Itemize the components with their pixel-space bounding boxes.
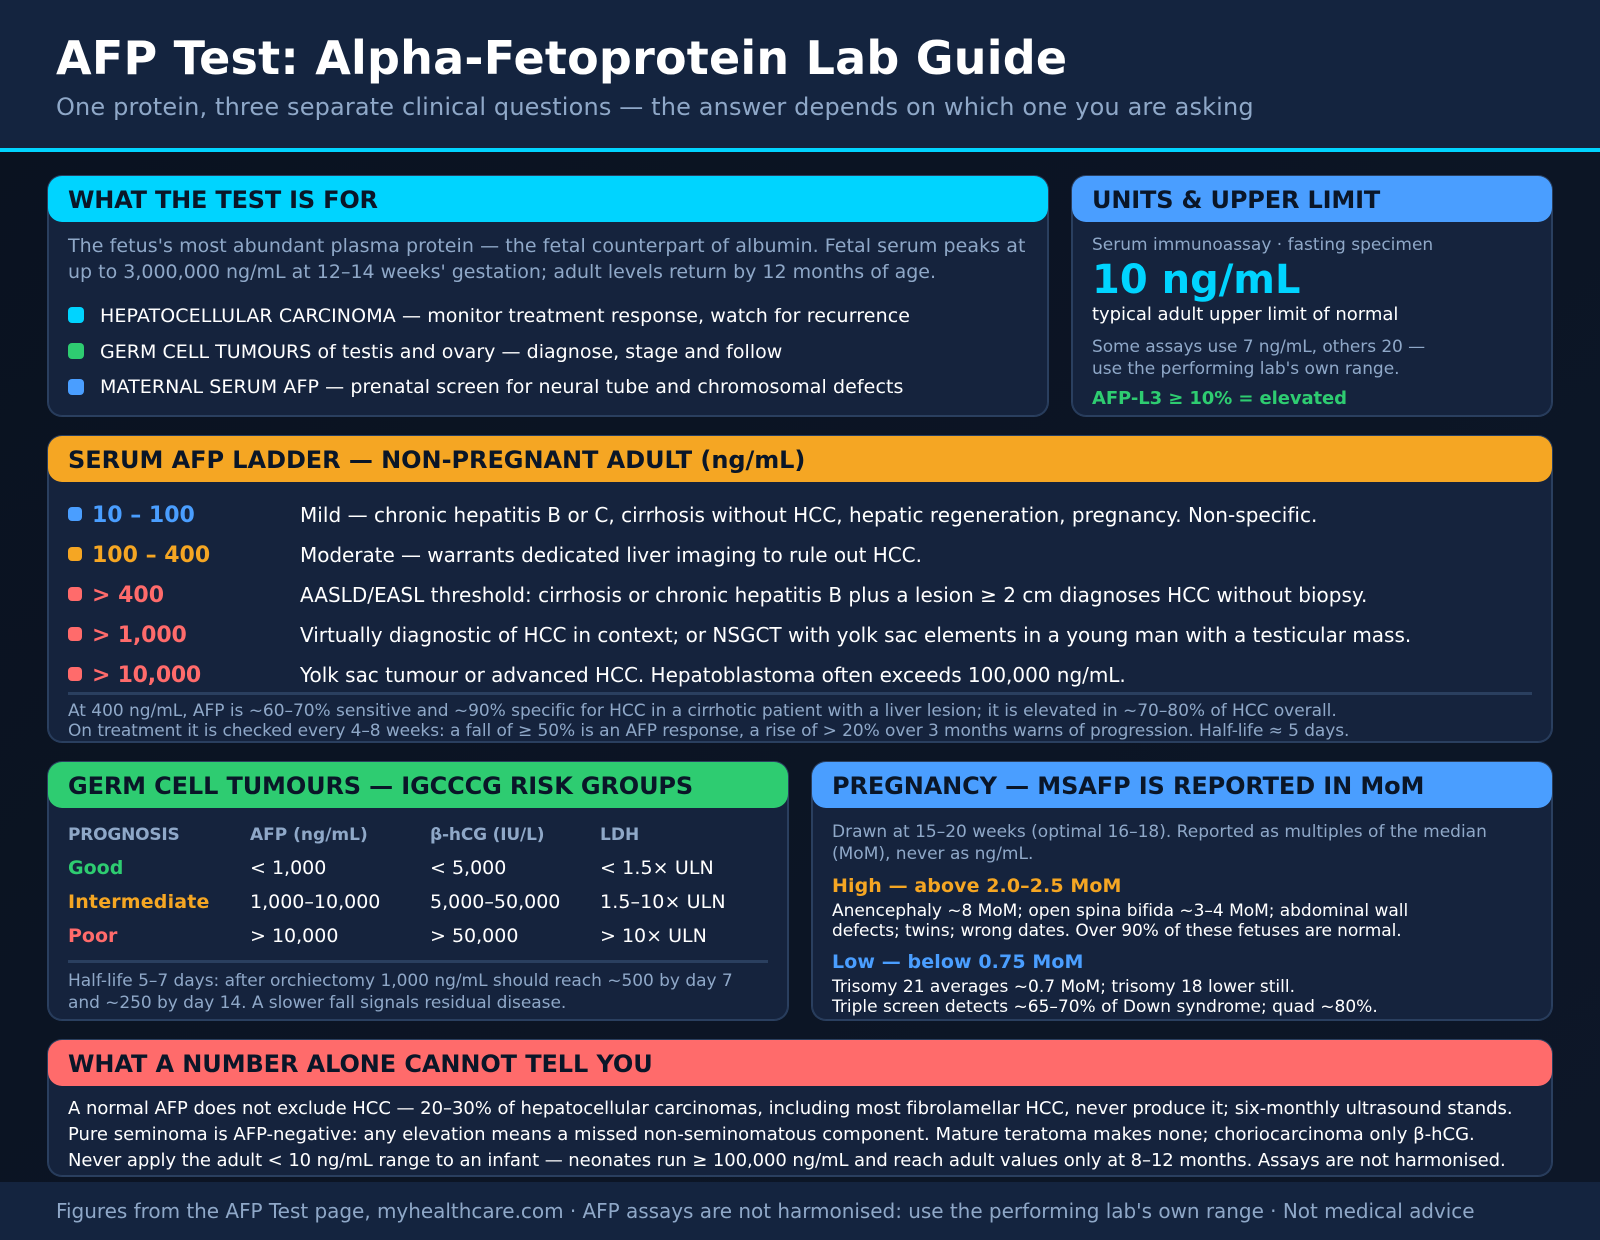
risk table: < 1.5× ULN: [600, 857, 714, 879]
heading: germ cell: GERM CELL TUMOURS — IGCCCG RISK GROUPS: [68, 772, 693, 800]
ladder row >10,000: Yolk sac tumour or advanced HCC. Hepatoblastoma often exceeds 100,000 ng/mL.: [300, 663, 1126, 687]
risk table: < 5,000: [430, 857, 506, 879]
ladder footnote: At 400 ng/mL, AFP is ~60–70% sensitive and ~90% specific for HCC in a cirrhotic patient with a liver lesion; it is elevated in ~70–80% of HCC overall.: [68, 701, 1337, 721]
ladder row >400: > 400: [92, 583, 164, 608]
ladder row >1,000: > 1,000: [92, 623, 187, 648]
risk table: [68, 825, 726, 947]
use list: [68, 305, 910, 398]
footer: [0, 1182, 1600, 1240]
subtitle: One protein, three separate clinical questions — the answer depends on which one you are asking: [56, 93, 1254, 121]
half-life note: Half-life 5–7 days: after orchiectomy 1,000 ng/mL should reach ~500 by day 7: [68, 971, 733, 991]
risk table: > 50,000: [430, 925, 518, 947]
ladder row >400: AASLD/EASL threshold: cirrhosis or chronic hepatitis B plus a lesion ≥ 2 cm diagnoses HCC without biopsy.: [300, 583, 1367, 607]
high MoM text: defects; twins; wrong dates. Over 90% of these fetuses are normal.: [832, 921, 1402, 941]
assay note: use the performing lab's own range.: [1092, 359, 1400, 379]
high MoM heading: High — above 2.0–2.5 MoM: [832, 875, 1121, 897]
pregnancy intro: Drawn at 15–20 weeks (optimal 16–18). Reported as multiples of the median (MoM), never as ng/mL.: [832, 822, 1487, 864]
panel: what a number alone cannot tell you: [48, 1040, 1552, 1176]
heading: what the test is for: WHAT THE TEST IS FOR: [68, 186, 378, 214]
ladder row 10-100: Mild — chronic hepatitis B or C, cirrhosis without HCC, hepatic regeneration, pregnancy. Non-specific.: [300, 503, 1317, 527]
title: AFP Test: Alpha-Fetoprotein Lab Guide: [56, 31, 1067, 85]
ladder footnote: [68, 701, 1349, 741]
risk table: Good: [68, 857, 123, 879]
assay note: [1092, 337, 1425, 379]
risk table: PROGNOSIS: [68, 825, 179, 845]
limits text: Never apply the adult < 10 ng/mL range to an infant — neonates run ≥ 100,000 ng/mL and reach adult values only at 8–12 months. Assays are not harmonised.: [68, 1150, 1506, 1171]
heading: ladder: SERUM AFP LADDER — NON-PREGNANT ADULT (ng/mL): [68, 446, 805, 474]
risk table: β-hCG (IU/L): [430, 825, 544, 845]
low MoM text: Trisomy 21 averages ~0.7 MoM; trisomy 18 lower still. Triple screen detects ~65–70% of Down syndrome; quad ~80%.: [832, 977, 1378, 1017]
high MoM text: Anencephaly ~8 MoM; open spina bifida ~3–4 MoM; abdominal wall: [832, 901, 1408, 921]
half-life note: and ~250 by day 14. A slower fall signals residual disease.: [68, 993, 566, 1013]
ladder row 100-400: Moderate — warrants dedicated liver imaging to rule out HCC.: [300, 543, 922, 567]
AFP-L3 note: AFP-L3 ≥ 10% = elevated: [1092, 388, 1347, 409]
risk table: < 1,000: [250, 857, 326, 879]
risk table: Poor: [68, 925, 117, 947]
limits text: [68, 1098, 1513, 1171]
big number: 10 ng/mL: [1092, 257, 1300, 303]
intro text: [68, 235, 1025, 283]
risk table: 1.5–10× ULN: [600, 891, 726, 913]
half-life note: [68, 971, 733, 1013]
limits text: Pure seminoma is AFP-negative: any elevation means a missed non-seminomatous component. Mature teratoma makes none; choriocarcinoma only β-hCG.: [68, 1124, 1475, 1145]
ladder row 100-400: [68, 543, 922, 568]
ladder row >1,000: Virtually diagnostic of HCC in context; or NSGCT with yolk sac elements in a young man with a testicular mass.: [300, 623, 1411, 647]
footer: Figures from the AFP Test page, myhealthcare.com · AFP assays are not harmonised: use the performing lab's own range · Not medical advice: [56, 1199, 1475, 1223]
intro text: up to 3,000,000 ng/mL at 12–14 weeks' gestation; adult levels return by 12 months of age.: [68, 261, 936, 283]
risk table: 1,000–10,000: [250, 891, 380, 913]
panel: what the test is for: [48, 176, 1048, 416]
use list: MATERNAL SERUM AFP — prenatal screen for neural tube and chromosomal defects: [100, 376, 904, 398]
specimen note: Serum immunoassay · fasting specimen: [1092, 235, 1433, 255]
assay note: Some assays use 7 ng/mL, others 20 —: [1092, 337, 1425, 357]
panel: pregnancy: [812, 762, 1552, 1020]
limits text: A normal AFP does not exclude HCC — 20–30% of hepatocellular carcinomas, including most fibrolamellar HCC, never produce it; six-monthly ultrasound stands.: [68, 1098, 1513, 1119]
risk table: LDH: [600, 825, 639, 845]
risk table: > 10,000: [250, 925, 338, 947]
heading: units: UNITS & UPPER LIMIT: [1092, 186, 1380, 214]
intro text: The fetus's most abundant plasma protein — the fetal counterpart of albumin. Fetal serum peaks at: [68, 235, 1025, 257]
ladder row >10,000: > 10,000: [92, 663, 201, 688]
panel: units and upper limit: [1072, 176, 1552, 416]
ladder row 10-100: 10 – 100: [92, 503, 195, 528]
use list: GERM CELL TUMOURS of testis and ovary — diagnose, stage and follow: [100, 341, 782, 363]
use list: HEPATOCELLULAR CARCINOMA — monitor treatment response, watch for recurrence: [100, 305, 910, 327]
high MoM text: [832, 901, 1408, 941]
low MoM heading: Low — below 0.75 MoM: [832, 951, 1084, 973]
heading: limits: WHAT A NUMBER ALONE CANNOT TELL YOU: [68, 1050, 653, 1078]
panel: germ cell tumours: [48, 762, 788, 1020]
risk table: > 10× ULN: [600, 925, 707, 947]
ladder footnote: On treatment it is checked every 4–8 weeks: a fall of ≥ 50% is an AFP response, a rise of > 20% over 3 months warns of progression. Half-life ≈ 5 days.: [68, 721, 1349, 741]
heading: pregnancy: PREGNANCY — MSAFP IS REPORTED IN MoM: [832, 772, 1424, 800]
risk table: Intermediate: [68, 891, 210, 913]
risk table: AFP (ng/mL): [250, 825, 368, 845]
risk table: 5,000–50,000: [430, 891, 560, 913]
header band: [0, 0, 1600, 152]
ladder row 100-400: 100 – 400: [92, 543, 210, 568]
panel: serum AFP ladder: [48, 436, 1552, 742]
limit label: typical adult upper limit of normal: [1092, 304, 1398, 325]
